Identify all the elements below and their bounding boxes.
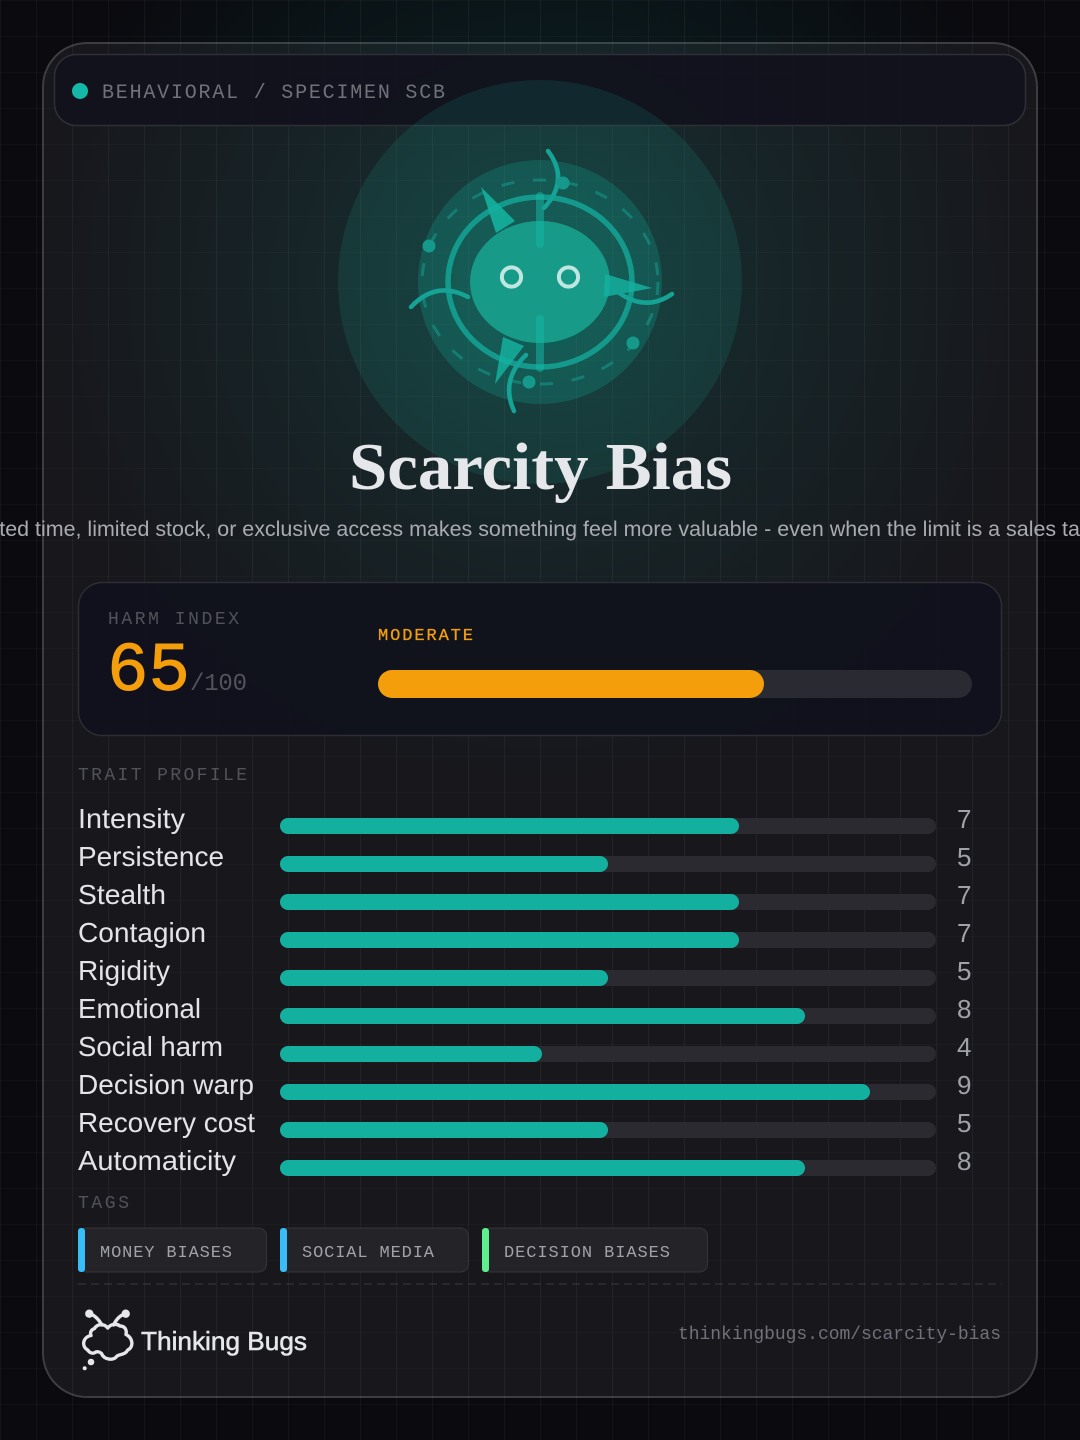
title: Scarcity Bias	[349, 430, 732, 504]
trait: persistence: 5	[957, 842, 971, 872]
icon: cloud bug	[84, 1314, 132, 1359]
harm score: 65	[107, 633, 190, 712]
trait: automaticity	[78, 1145, 971, 1176]
trait: persistence	[78, 841, 971, 872]
trait: contagion	[78, 917, 971, 948]
tag: decision biases: DECISION BIASES	[504, 1244, 670, 1263]
harm score maximum: /100	[190, 671, 247, 698]
trait: decision warp: 9	[957, 1070, 971, 1100]
severity label: MODERATE	[378, 627, 473, 646]
trait: contagion: 7	[957, 918, 971, 948]
trait: intensity: 7	[957, 804, 971, 834]
trait: intensity: Intensity	[78, 803, 185, 834]
trait: emotional	[78, 993, 971, 1024]
tag: social media	[280, 1228, 468, 1272]
trait: social harm: 4	[957, 1032, 971, 1062]
trait: stealth	[78, 879, 971, 910]
trait: rigidity: Rigidity	[78, 955, 170, 986]
panel: harm index	[78, 582, 1002, 736]
tag: money biases: MONEY BIASES	[100, 1244, 232, 1263]
brand name: Thinking Bugs	[141, 1326, 307, 1356]
trait: contagion: Contagion	[78, 917, 206, 948]
trait: stealth: 7	[957, 880, 971, 910]
trait: recovery cost: 5	[957, 1108, 971, 1138]
trait: automaticity: Automaticity	[78, 1145, 236, 1176]
trait: emotional: 8	[957, 994, 971, 1024]
trait: recovery cost	[78, 1107, 971, 1138]
trait: recovery cost: Recovery cost	[78, 1107, 255, 1138]
trait: rigidity: 5	[957, 956, 971, 986]
trait: automaticity: 8	[957, 1146, 971, 1176]
trait: stealth: Stealth	[78, 879, 166, 910]
trait: persistence: Persistence	[78, 841, 224, 872]
trait: decision warp	[78, 1069, 971, 1100]
trait: decision warp: Decision warp	[78, 1069, 254, 1100]
tag: social media: SOCIAL MEDIA	[302, 1244, 435, 1263]
panel: header bar	[54, 54, 1026, 126]
logo: thinking bugs	[83, 1310, 307, 1370]
harm meter	[378, 670, 972, 698]
icon: status dot	[72, 83, 88, 99]
chart: trait bars	[78, 803, 971, 1176]
trait: emotional: Emotional	[78, 993, 201, 1024]
icon: bug mascot	[338, 80, 742, 484]
source url: thinkingbugs.com/scarcity-bias	[678, 1325, 1001, 1345]
heading: tags: TAGS	[78, 1194, 129, 1214]
trait: intensity	[78, 803, 971, 834]
harm index label: HARM INDEX	[108, 610, 239, 630]
tag: money biases	[78, 1228, 266, 1272]
heading: trait profile: TRAIT PROFILE	[78, 766, 247, 786]
trait: social harm	[78, 1031, 971, 1062]
trait: social harm: Social harm	[78, 1031, 223, 1062]
trait: rigidity	[78, 955, 971, 986]
header label: BEHAVIORAL / SPECIMEN SCB	[102, 82, 445, 105]
tag: decision biases	[482, 1228, 708, 1272]
